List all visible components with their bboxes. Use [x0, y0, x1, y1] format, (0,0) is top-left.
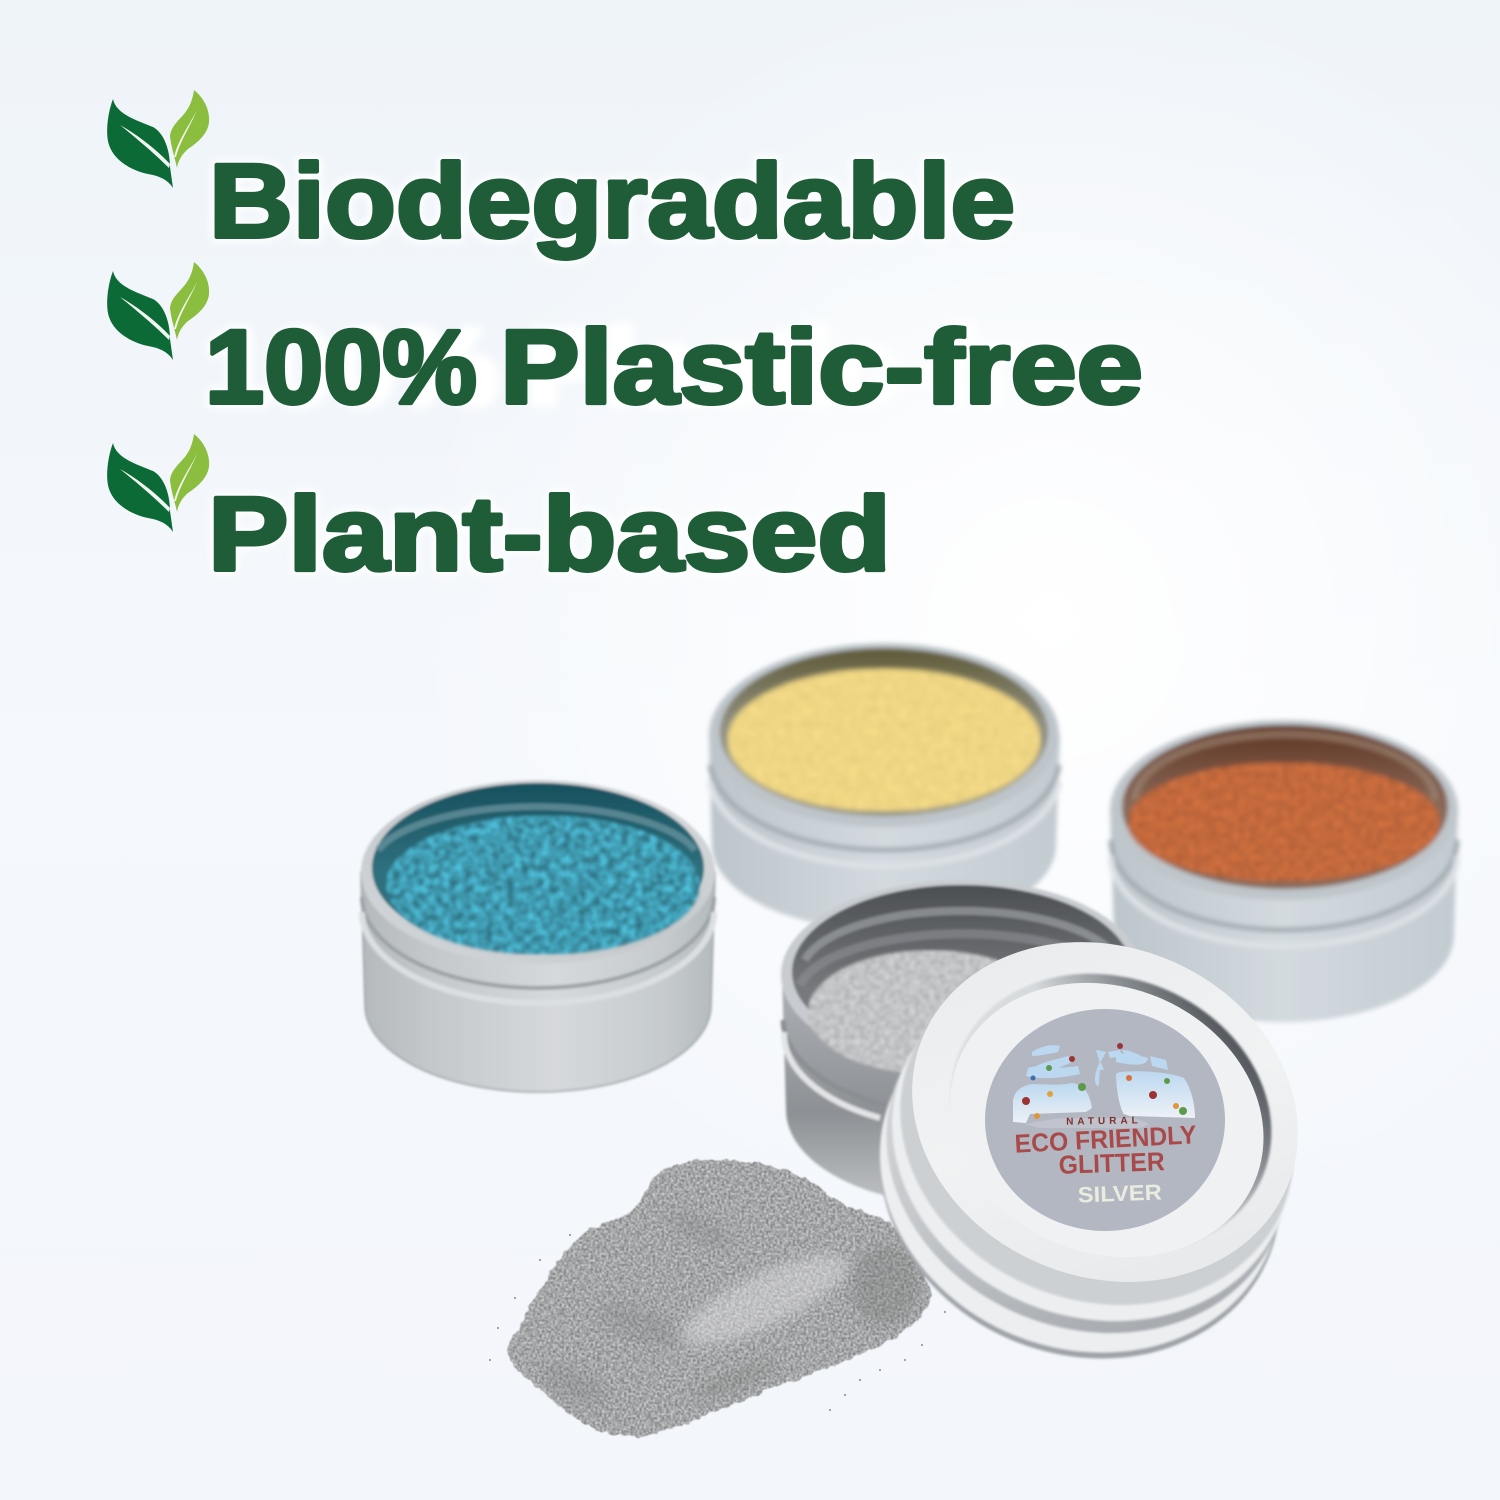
heading: 100% Plastic-free: 100% Plastic-free	[205, 309, 1143, 426]
label: silver sticker: NATURAL	[1066, 1115, 1142, 1128]
orange glitter tin	[1110, 720, 1458, 1022]
stray grains	[489, 1234, 946, 1411]
heading: 100% Plastic-free: Plastic-free	[500, 309, 1143, 426]
heading: Biodegradable: Biodegradable	[209, 143, 1015, 260]
silver glitter tin	[781, 880, 1145, 1205]
heading: Biodegradable: Biodegradable	[209, 143, 1015, 260]
label: silver sticker: GLITTER	[1058, 1146, 1165, 1180]
icon: leaves, plant-based	[107, 434, 209, 532]
label: silver sticker: SILVER	[1077, 1180, 1162, 1207]
pile shading	[536, 1204, 919, 1413]
lid top face	[861, 885, 1349, 1339]
lid inner recess	[908, 926, 1314, 1303]
heading: Plant-based: Plant-based	[208, 476, 891, 593]
icon: leaves, biodegradable	[107, 90, 209, 188]
icon: leaves, plastic-free	[107, 262, 209, 360]
glitter pile	[489, 1160, 946, 1437]
tree logo	[1013, 1043, 1195, 1128]
heading: Plant-based: Plant-based	[208, 476, 891, 593]
heading: 100% Plastic-free: 100%	[205, 309, 477, 426]
label: silver sticker: ECO FRIENDLY	[1014, 1119, 1197, 1159]
yellow glitter tin	[709, 643, 1060, 930]
lid with label	[826, 885, 1349, 1418]
label: silver sticker	[985, 1009, 1225, 1231]
lid side wall	[826, 901, 1346, 1418]
teal glitter tin	[361, 780, 715, 1092]
